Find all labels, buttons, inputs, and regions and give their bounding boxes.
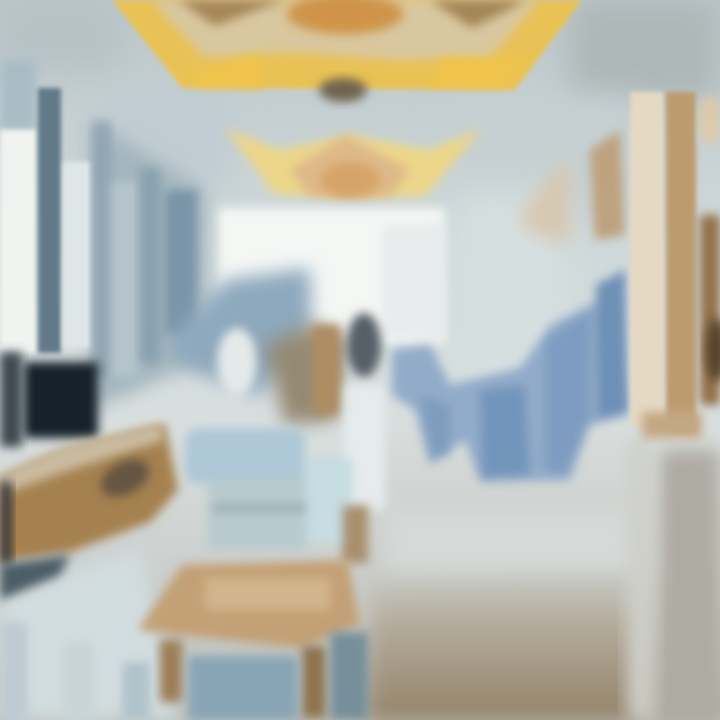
floor bbox=[0, 425, 720, 720]
ceiling fixture: large yellow hexagon bbox=[112, 0, 582, 102]
wooden sofa foreground bbox=[0, 424, 178, 600]
bottom left glass and floor reflections bbox=[2, 622, 150, 720]
blue armchair bbox=[185, 428, 368, 563]
ceiling fixture: small yellow chevron bbox=[225, 128, 482, 198]
wooden table bbox=[138, 560, 368, 720]
left window wall bbox=[0, 60, 205, 410]
bright central window bbox=[218, 190, 565, 390]
right blue wave artwork bbox=[392, 268, 630, 482]
central blue and wood blur bbox=[165, 268, 385, 510]
right wood columns and arches bbox=[520, 92, 720, 438]
dark screen bbox=[0, 352, 98, 447]
